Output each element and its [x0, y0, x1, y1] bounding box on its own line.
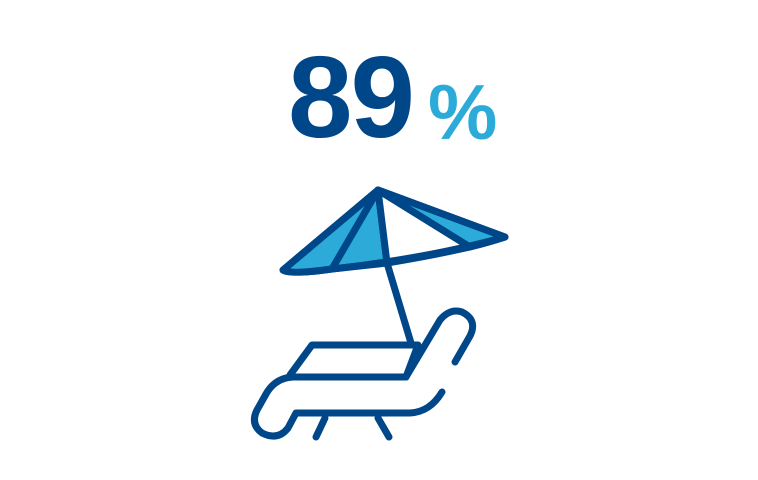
- chair seat: [254, 377, 442, 436]
- chair backrest: [290, 345, 418, 377]
- umbrella pole: [387, 263, 411, 343]
- title: percentage: [288, 32, 497, 162]
- chair back hook: [406, 311, 473, 377]
- legs: [316, 418, 325, 437]
- number 89: 89: [288, 32, 413, 162]
- umbrella canopy: [283, 190, 505, 272]
- percent sign: %: [428, 68, 497, 156]
